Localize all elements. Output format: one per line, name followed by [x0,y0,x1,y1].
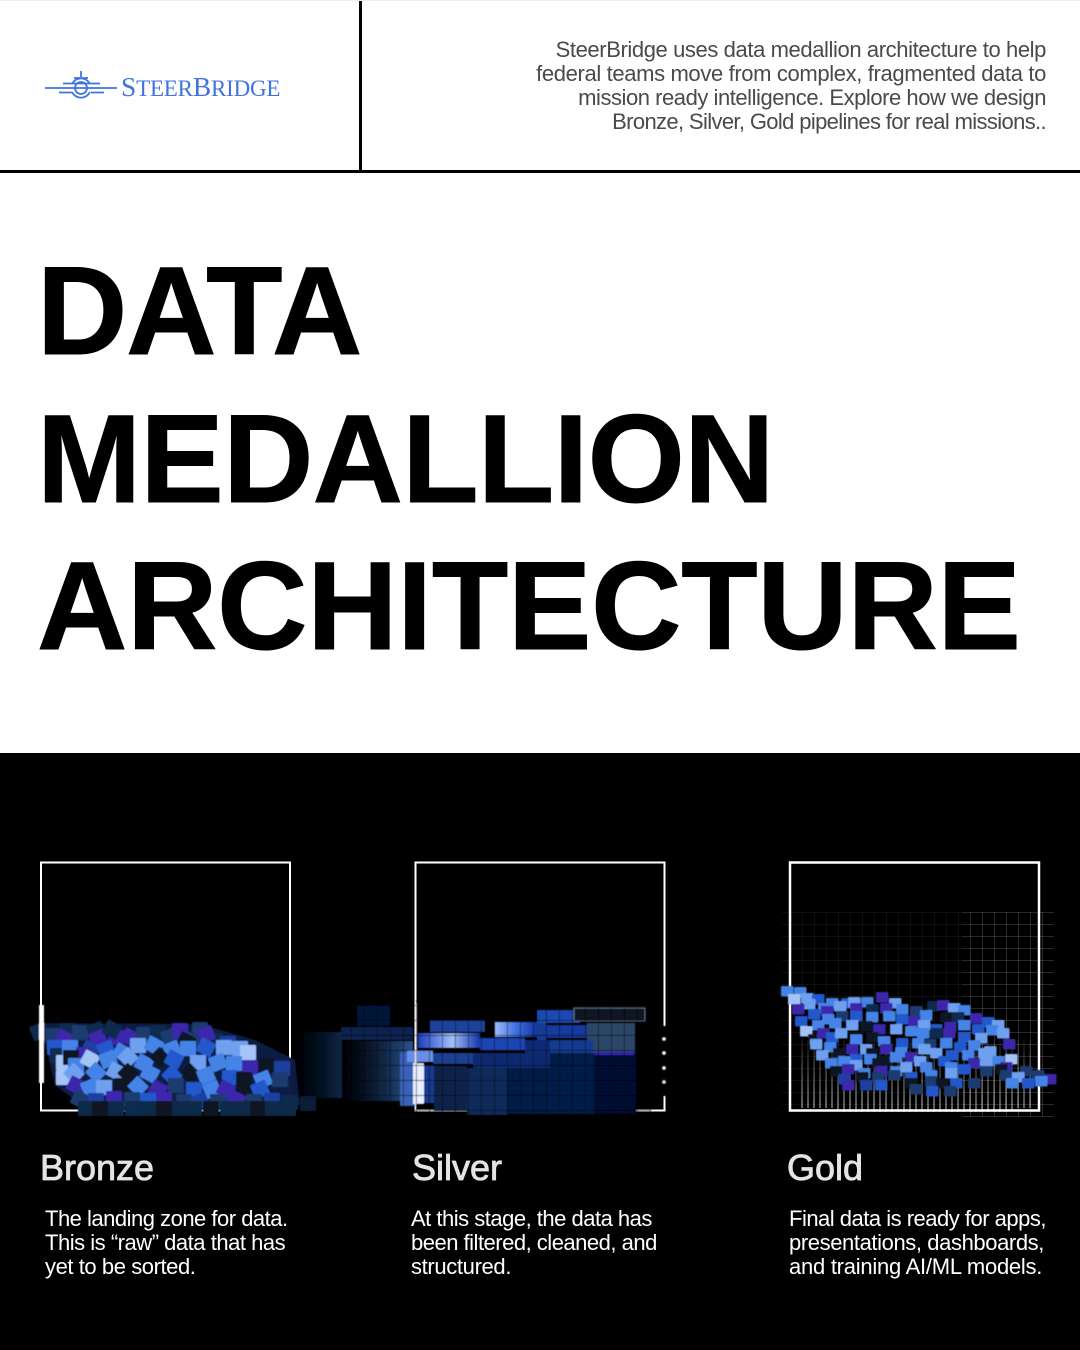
text: bronze: yet to be sorted. [45,1254,195,1279]
intro text: mission ready intelligence. Explore how we design [578,85,1046,110]
stage: silver [411,1147,657,1279]
text: silver: been filtered, cleaned, and [411,1230,657,1255]
text: silver: structured. [411,1254,511,1279]
frame: bronze [41,862,290,1110]
text: bronze [45,1206,288,1279]
heading: silver: Silver [412,1147,502,1188]
text: gold: presentations, dashboards, [789,1230,1044,1255]
frame: gold [790,862,1039,1110]
stage: bronze [40,1147,288,1279]
silver structured blocks [292,1000,668,1115]
title line 3: ARCHITECTURE [37,537,1021,676]
text: silver [411,1206,657,1279]
title line 1: DATA [37,242,361,381]
text: bronze: This is “raw” data that has [45,1230,285,1255]
intro text [536,37,1046,134]
heading: bronze: Bronze [40,1147,154,1188]
text: silver: At this stage, the data has [411,1206,652,1231]
text: gold [789,1206,1046,1279]
bronze data pile [29,1005,316,1116]
header top bar [0,0,1080,173]
gold grid backdrop [782,912,1054,1117]
graphics: three stage visuals [28,861,1058,1117]
stage: gold [787,1147,1046,1279]
intro text: federal teams move from complex, fragmented data to [536,61,1046,86]
heading: gold: Gold [787,1147,863,1188]
logo panel divider [359,1,362,171]
gold tile surface [781,986,1056,1096]
text: bronze: The landing zone for data. [45,1206,288,1231]
dark lower panel [0,753,1080,1350]
text: gold: and training AI/ML models. [789,1254,1042,1279]
logo: SteerBridge [45,71,280,102]
intro text: Bronze, Silver, Gold pipelines for real missions.. [612,109,1046,134]
frame: silver [416,862,664,1110]
title line 2: MEDALLION [37,390,774,529]
intro text: SteerBridge uses data medallion architecture to help [556,37,1046,62]
title [37,242,1021,676]
logo: SteerBridge: STEERBRIDGE [121,71,280,102]
text: gold: Final data is ready for apps, [789,1206,1046,1231]
